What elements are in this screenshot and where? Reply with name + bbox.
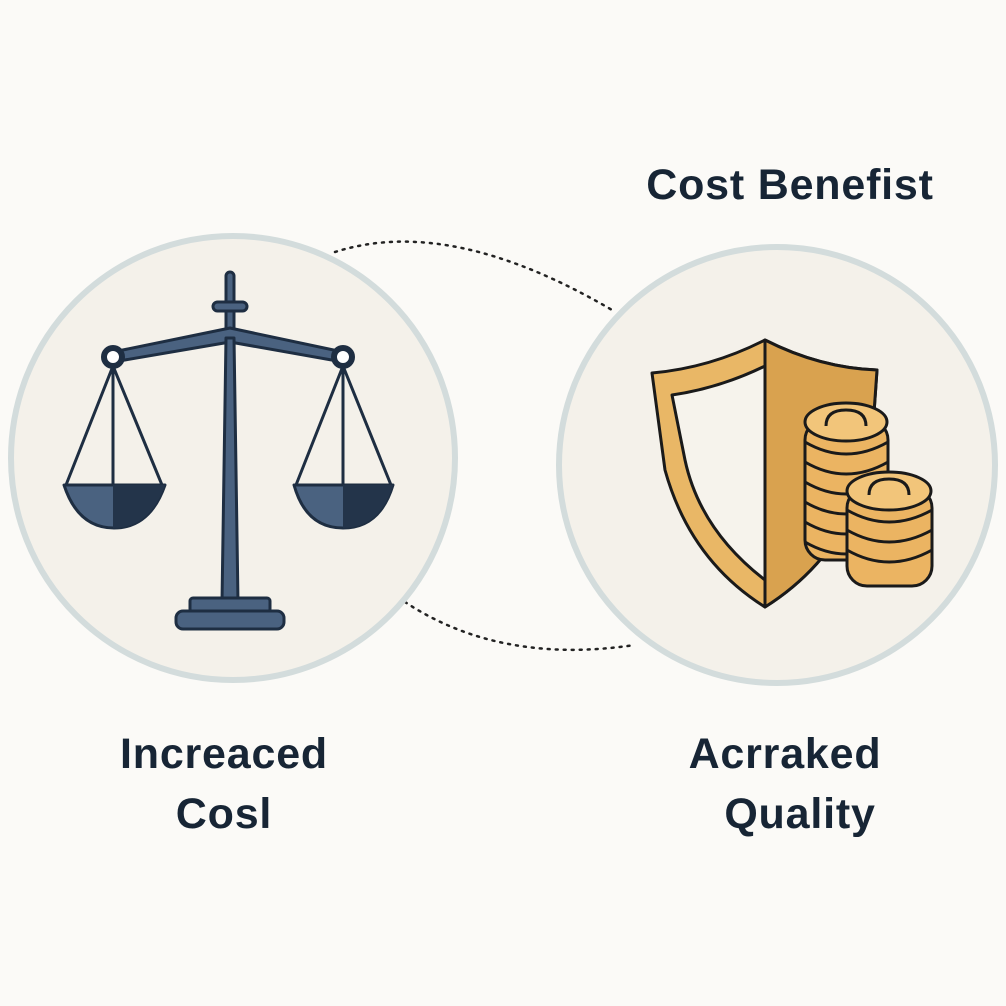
- panel: left circle: [11, 236, 455, 680]
- label: increased cost: Increaced: [120, 730, 328, 778]
- connector: lower dotted arc: [405, 602, 635, 650]
- icon: balance scale: [64, 272, 393, 629]
- panel: right circle: [559, 247, 995, 683]
- icon: shield with coins: [652, 340, 932, 607]
- label: increased cost: [120, 730, 328, 838]
- label: acrraked quality: Acrraked: [689, 730, 881, 778]
- label: increased cost: Cosl: [176, 790, 272, 838]
- connector: upper dotted arc: [335, 242, 612, 310]
- label: acrraked quality: [689, 730, 881, 838]
- label: acrraked quality: Quality: [724, 790, 876, 838]
- title: Cost Benefist: [646, 161, 934, 209]
